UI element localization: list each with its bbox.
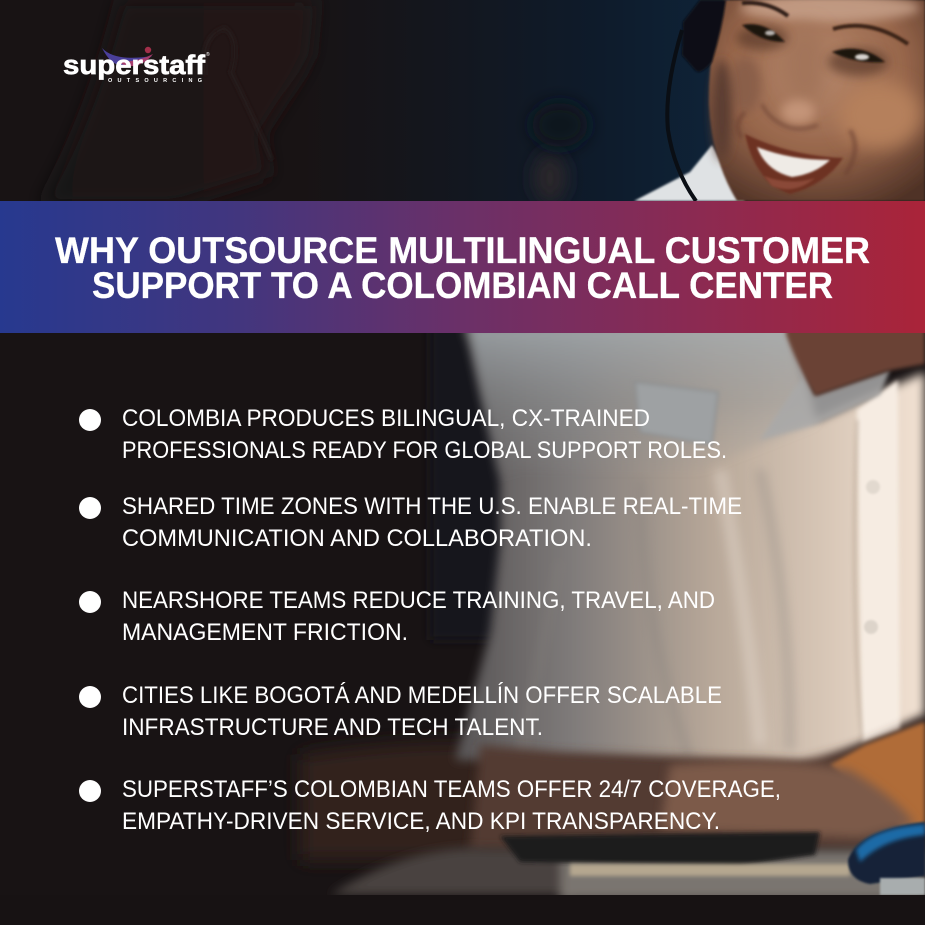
button placket <box>857 380 900 742</box>
cheek crease <box>738 112 855 175</box>
shirt torso and sleeve <box>455 325 925 765</box>
logo: Superstaff Outsourcing: ® <box>206 51 210 58</box>
list of reasons <box>79 405 781 835</box>
reason 2 <box>79 493 742 552</box>
desk, papers, phone and mouse <box>330 822 925 900</box>
reason 5: EMPATHY-DRIVEN SERVICE, AND KPI TRANSPARENCY. <box>122 808 720 835</box>
shirt folds <box>684 472 796 750</box>
mouth <box>745 134 843 194</box>
reason 4: CITIES LIKE BOGOTÁ AND MEDELLÍN OFFER SCALABLE <box>122 682 722 709</box>
logo: Superstaff Outsourcing: superstaff <box>63 50 206 80</box>
headset <box>682 0 726 72</box>
reason 1: COLOMBIA PRODUCES BILINGUAL, CX-TRAINED <box>122 405 650 432</box>
title <box>55 230 870 306</box>
reason 5 <box>79 776 781 835</box>
reason 1 <box>79 405 727 464</box>
reason 2: COMMUNICATION AND COLLABORATION. <box>122 525 592 552</box>
face shape <box>709 0 925 201</box>
nose shadow <box>762 104 818 129</box>
reason 3: NEARSHORE TEAMS REDUCE TRAINING, TRAVEL, AND <box>122 587 715 614</box>
logo swoosh <box>102 48 152 66</box>
eyes <box>736 26 788 50</box>
collar <box>634 145 745 201</box>
reason 3 <box>79 587 715 646</box>
logo: Superstaff Outsourcing: OUTSOURCING <box>108 78 202 84</box>
title: WHY OUTSOURCE MULTILINGUAL CUSTOMER <box>55 230 870 271</box>
heading band <box>0 201 925 333</box>
background photo: top region <box>202 0 925 201</box>
reason 3: MANAGEMENT FRICTION. <box>122 619 408 646</box>
photo: smiling agent face with headset <box>634 0 925 201</box>
title: SUPPORT TO A COLOMBIAN CALL CENTER <box>92 265 833 306</box>
reason 5: SUPERSTAFF’S COLOMBIAN TEAMS OFFER 24/7 COVERAGE, <box>122 776 781 803</box>
dark navy gap left of shirt <box>433 333 484 640</box>
eyebrows <box>742 3 788 16</box>
photo: lower region <box>300 320 925 900</box>
shirt buttons <box>866 480 880 494</box>
forearm and hand on keyboard <box>470 718 925 850</box>
shirt pocket <box>635 382 718 445</box>
blurred colleague on left <box>40 0 588 205</box>
reason 2: SHARED TIME ZONES WITH THE U.S. ENABLE REAL-TIME <box>122 493 742 520</box>
raised sleeve cuff <box>764 362 892 438</box>
reason 4: INFRASTRUCTURE AND TECH TALENT. <box>122 714 543 741</box>
raised arm <box>786 325 925 396</box>
reason 4 <box>79 682 722 741</box>
bottom dark strip <box>0 895 925 925</box>
dark blue office <box>416 0 730 201</box>
reason 1: PROFESSIONALS READY FOR GLOBAL SUPPORT ROLES. <box>122 437 727 464</box>
arm and hand shadow at lower left <box>296 738 480 864</box>
